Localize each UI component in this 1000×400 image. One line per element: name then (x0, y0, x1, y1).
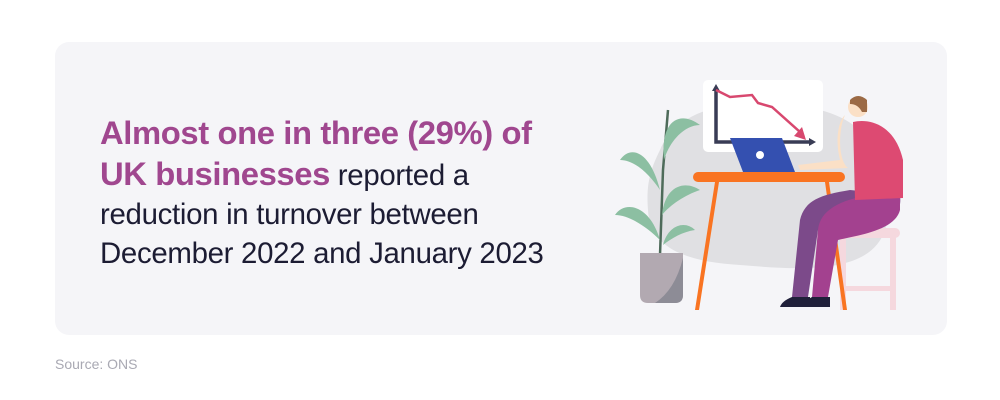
icon: plant (615, 110, 700, 303)
panel: card (55, 42, 947, 335)
text block: headline: Almost one in three (29%) of (100, 114, 532, 151)
text block: headline: December 2022 and January 2023 (100, 237, 544, 270)
text block: headline: reduction in turnover between (100, 198, 479, 231)
icon: chart board (703, 80, 823, 152)
source note: Source: ONS (55, 356, 137, 372)
text block: headline: UK businesses reported a (100, 155, 469, 192)
icon: table (693, 172, 847, 310)
icon: stool (836, 228, 900, 310)
icon: person (780, 96, 903, 307)
background blob (648, 103, 890, 268)
icon: laptop (730, 138, 795, 172)
text block: headline (100, 114, 544, 270)
